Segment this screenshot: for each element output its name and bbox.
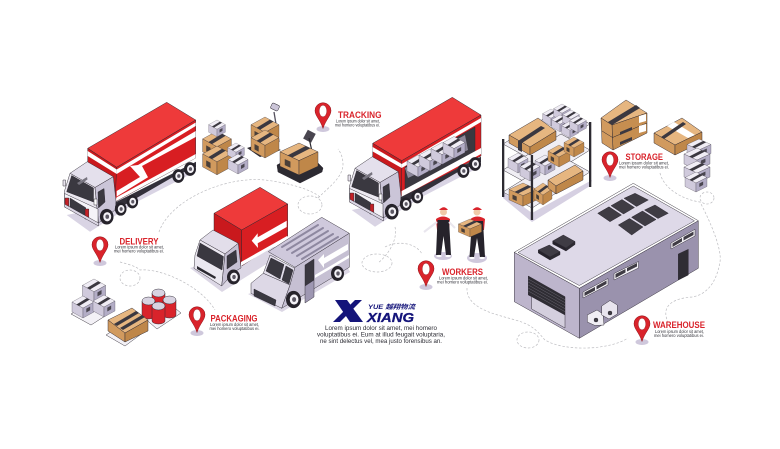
truck: delivery semi <box>63 102 197 232</box>
dashed route: delivery to tracking <box>159 149 343 232</box>
label: packaging <box>210 314 260 331</box>
label: workers: WORKERS <box>442 267 483 277</box>
truck: red box truck <box>190 187 292 292</box>
dashed route: delivery to packaging <box>120 262 215 310</box>
shelf with boxes <box>502 104 592 222</box>
label: warehouse: mei homero voluptatibus ei. <box>654 333 704 338</box>
shelf posts <box>502 122 591 220</box>
truck open cargo box <box>373 97 481 198</box>
truck cab <box>348 157 482 227</box>
pallet with grey boxes <box>71 279 115 325</box>
air conditioners <box>587 300 617 326</box>
logo mark <box>333 300 363 322</box>
packaging goods <box>71 279 181 346</box>
pin: storage <box>602 152 618 181</box>
label: tracking <box>335 110 382 128</box>
label: storage: Lorem ipsum dolor sit amet, <box>619 160 669 166</box>
label: tracking: TRACKING <box>338 110 382 120</box>
label: workers: mei homero voluptatibus ei. <box>437 280 488 284</box>
grey box stack <box>684 139 711 192</box>
pin: workers <box>418 261 434 290</box>
parcels: tracking stack <box>203 120 248 175</box>
van roof ribs <box>282 225 338 259</box>
truck: tracking semi with open side <box>348 97 482 227</box>
label: workers: Lorem ipsum dolor sit amet, <box>439 276 488 280</box>
workers <box>424 207 487 263</box>
wall windows <box>583 229 695 298</box>
logo wordmark bottom: XIANG <box>366 310 414 325</box>
label: storage: STORAGE <box>626 152 663 162</box>
van <box>248 217 350 312</box>
caption: Lorem ipsum dolor sit amet, mei homero <box>325 325 438 332</box>
small truck cab <box>194 230 287 286</box>
dashed route: truck to workers <box>362 227 422 272</box>
caption: ne sint delectus vel, mea justo forensibus an. <box>320 338 442 345</box>
dashed route: storage to warehouse <box>660 173 720 322</box>
pin: tracking <box>315 103 331 132</box>
warehouse walls <box>514 252 579 338</box>
caption: voluptatibus ei. Eum at illud feugait voluptaria, <box>317 332 445 338</box>
worker carrying box <box>458 207 485 259</box>
truck cab <box>63 162 197 232</box>
flat box stack <box>654 118 702 155</box>
roller door <box>528 276 565 328</box>
label: storage <box>619 152 669 170</box>
storage boxes <box>601 100 711 192</box>
pin: packaging <box>189 307 205 336</box>
label: tracking: mei homero voluptatibus ei. <box>335 122 380 128</box>
roof skylights <box>598 193 668 235</box>
long box stack <box>601 100 647 150</box>
label: packaging: mei homero voluptatibus ei. <box>210 326 260 331</box>
label: packaging: PACKAGING <box>210 314 258 324</box>
side door <box>678 249 688 280</box>
label: packaging: Lorem ipsum dolor sit amet, <box>210 322 259 327</box>
small truck box <box>214 187 288 266</box>
label: workers <box>437 267 488 284</box>
dashed route: workers to warehouse <box>467 288 628 348</box>
shelf planks <box>503 108 590 208</box>
label: delivery <box>114 236 164 254</box>
label: warehouse: Lorem ipsum dolor sit amet, <box>655 329 704 334</box>
shelf middle boxes <box>508 137 584 181</box>
label: storage: mei homero voluptatibus ei. <box>619 164 669 170</box>
parcels: hand truck <box>247 103 281 158</box>
pin: warehouse <box>634 316 650 345</box>
cargo pallets <box>405 135 468 178</box>
warehouse building <box>514 183 698 338</box>
parcels: weighing scale <box>277 130 323 183</box>
pin: delivery <box>92 237 108 266</box>
caption <box>317 325 445 345</box>
warehouse roof <box>514 183 698 288</box>
pallet with barrels <box>142 289 181 329</box>
label: delivery: DELIVERY <box>120 236 158 246</box>
worker with clipboard <box>424 207 455 257</box>
label: delivery: mei homero voluptatibus ei. <box>114 248 164 254</box>
label: warehouse: WAREHOUSE <box>653 320 705 330</box>
shelf bottom boxes <box>509 165 583 206</box>
label: warehouse <box>653 320 705 338</box>
logo wordmark top: YUE 越翔物流 <box>368 303 417 311</box>
logo <box>333 300 417 325</box>
label: delivery: Lorem ipsum dolor sit amet, <box>115 244 164 250</box>
roof vents <box>538 235 575 260</box>
label: tracking: Lorem ipsum dolor sit amet, <box>336 118 380 124</box>
truck cargo box <box>88 102 196 202</box>
pallet with cardboard boxes <box>106 308 148 346</box>
shelf top boxes <box>509 104 586 155</box>
